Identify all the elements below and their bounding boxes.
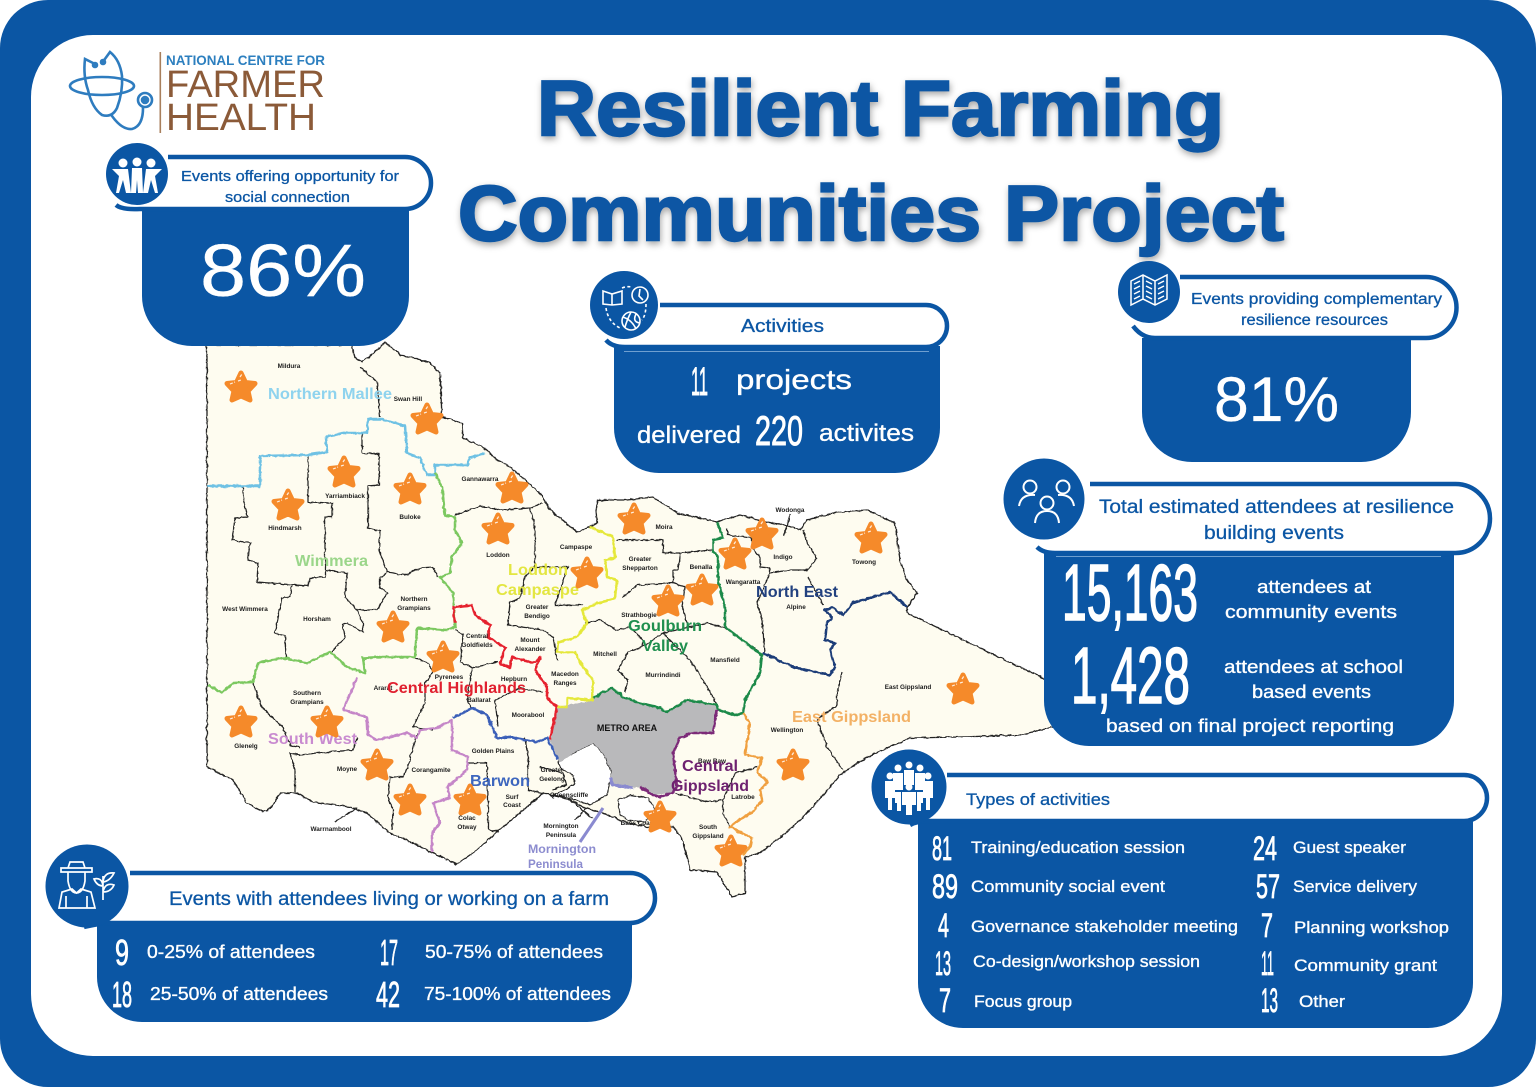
header text (1099, 497, 1454, 544)
Loddon Campaspe boundary (557, 527, 617, 707)
region labels: Loddon (508, 562, 568, 579)
local government labels: Hindmarsh (268, 525, 302, 532)
panel header (606, 305, 947, 347)
header text: Types of activities (966, 790, 1110, 809)
local government labels: Towong (852, 559, 876, 566)
local government labels: Ararat (374, 685, 393, 692)
panel body (1142, 338, 1411, 462)
local government labels: Queenscliffe (550, 792, 589, 799)
icon: three people (1004, 458, 1084, 540)
local government labels: Murrindindi (645, 672, 681, 679)
local government labels: Horsham (303, 616, 331, 623)
South West boundary (343, 678, 468, 852)
icon: farmer with plant (46, 844, 128, 928)
Goulburn Valley boundary (593, 522, 762, 715)
local government labels: Mornington (543, 823, 579, 830)
statistic: 1,428 school attendees: 1,428 (1071, 631, 1190, 720)
local government labels: Pyrenees (435, 674, 464, 681)
region labels: Peninsula (528, 857, 583, 871)
statistic: delivered 220 activites: 220 (755, 407, 803, 454)
left activity list: Co-design/workshop session (973, 953, 1200, 971)
panel header (1037, 484, 1490, 553)
local government boundaries (232, 367, 843, 831)
icon: people arm in arm (106, 143, 168, 205)
local government labels: Corangamite (411, 767, 451, 774)
header text: Events offering opportunity for (181, 168, 399, 185)
header text (181, 168, 399, 206)
local government labels: Latrobe (731, 794, 755, 801)
Central Highlands boundary (453, 605, 557, 740)
right activity list: Service delivery (1293, 878, 1418, 896)
statistic: 11 projects: projects (736, 364, 852, 395)
reporting note: based on final project reporting (1106, 715, 1394, 736)
local government labels: Geelong (539, 776, 565, 783)
local government labels: Alpine (786, 604, 806, 611)
North East boundary (763, 592, 907, 675)
statistic: 1,428 school attendees (1071, 631, 1403, 720)
header text: Total estimated attendees at resilience (1099, 497, 1454, 518)
left activity list: 89 (932, 868, 958, 906)
local government labels: Buloke (399, 514, 421, 521)
Central Gippsland boundary (640, 710, 717, 797)
local government labels (222, 363, 931, 840)
Mornington Peninsula boundary (610, 778, 633, 788)
local government labels: METRO AREA (597, 723, 658, 733)
region labels: Barwon (470, 773, 530, 790)
Barwon boundary (453, 708, 558, 760)
local government labels: Loddon (486, 552, 510, 559)
statistic: 1,428 school attendees: based events (1252, 681, 1371, 702)
statistic: delivered 220 activites: activites (819, 420, 914, 447)
icon: brochure (1118, 261, 1180, 323)
local government labels: Benalla (690, 564, 713, 571)
local government labels: Wangaratta (726, 579, 761, 586)
left activity list: 81 (932, 830, 952, 868)
right activity list: Guest speaker (1293, 839, 1407, 857)
thin divider (624, 351, 929, 352)
region labels: Wimmera (295, 553, 368, 570)
statistic: 11 projects: 11 (691, 360, 708, 404)
local government labels: Mansfield (710, 657, 740, 664)
local government labels: Ranges (553, 680, 577, 687)
left activity list: Focus group (974, 993, 1072, 1011)
local government labels: Goldfields (461, 642, 493, 649)
local government labels: Colac (458, 815, 476, 822)
local government labels: Swan Hill (394, 396, 422, 403)
logo text: HEALTH (166, 97, 316, 139)
farm attendance statistics: 9 (115, 932, 129, 973)
panel: activities (590, 271, 947, 473)
local government labels: Grampians (290, 699, 324, 706)
panel header (84, 873, 655, 927)
region labels: Valley (642, 638, 688, 655)
header text: social connection (225, 189, 350, 206)
panel body (614, 346, 940, 473)
left activity list: 4 (938, 907, 949, 945)
header text: Events with attendees living or working on a farm (169, 889, 609, 910)
title: Resilient Farming (537, 64, 1224, 152)
farm attendance statistics: 25-50% of attendees (150, 984, 328, 1004)
Northern Mallee boundary (207, 419, 485, 486)
panel body (918, 820, 1473, 1028)
statistic: 15,163 community attendees: community events (1225, 601, 1397, 622)
panel header (1133, 277, 1456, 338)
local government labels: Wodonga (776, 507, 805, 514)
region labels: South West (268, 731, 358, 748)
local government labels: Baw Baw (698, 758, 726, 765)
local government labels: Surf (506, 794, 519, 801)
farm attendance statistics: 75-100% of attendees (424, 984, 611, 1004)
local government labels: Mildura (278, 363, 301, 370)
project location stars (227, 373, 977, 864)
region labels: Gippsland (671, 778, 749, 795)
local government labels: Greater (541, 767, 564, 774)
statistic: 11 projects (691, 360, 852, 404)
region labels: Central (682, 758, 738, 775)
region labels: Mornington (528, 842, 596, 856)
local government labels: Peninsula (546, 832, 577, 839)
logo divider (160, 52, 161, 133)
statistic: 86%: 86% (200, 229, 366, 312)
local government labels: Yarriambiack (325, 493, 365, 500)
left activity list (932, 830, 1238, 1020)
left activity list: Governance stakeholder meeting (971, 918, 1238, 936)
local government labels: Central (466, 633, 488, 640)
farm attendance statistics: 0-25% of attendees (147, 942, 315, 962)
local government labels: Hepburn (501, 676, 527, 683)
farm attendance statistics: 50-75% of attendees (425, 942, 603, 962)
local government labels: Moira (655, 524, 673, 531)
title: Communities Project (458, 169, 1284, 257)
region labels: Northern Mallee (268, 386, 392, 403)
statistic: 15,163 community attendees: 15,163 (1062, 548, 1198, 637)
header text: building events (1204, 523, 1344, 544)
right activity list: 13 (1261, 982, 1278, 1020)
statistic: 81%: 81% (1214, 365, 1339, 435)
local government labels: Grampians (397, 605, 431, 612)
right activity list: 11 (1261, 945, 1274, 983)
farm attendance statistics (112, 932, 611, 1015)
farm attendance statistics: 42 (376, 974, 400, 1015)
region boundaries (207, 419, 907, 855)
statistic: 15,163 community attendees: attendees at (1257, 576, 1371, 597)
region labels: East Gippsland (792, 709, 911, 726)
farm attendance statistics: 18 (112, 974, 132, 1015)
map of Victoria (207, 342, 1060, 897)
right activity list: Other (1299, 993, 1346, 1011)
local government labels: Ballarat (467, 697, 492, 704)
Wimmera boundary (208, 473, 462, 693)
panel body (97, 922, 632, 1022)
panel: attendees on farms (46, 844, 655, 1022)
panel: total attendees (1004, 458, 1490, 746)
local government labels: Mount (520, 637, 540, 644)
statistic: delivered 220 activites (637, 407, 914, 454)
right activity list (1253, 830, 1449, 1020)
local government labels: Glenelg (234, 743, 258, 750)
local government labels: Bendigo (524, 613, 550, 620)
header text (1191, 291, 1442, 329)
local government labels: Wellington (771, 727, 803, 734)
icon: book clock and ball (590, 271, 658, 339)
local government labels: Golden Plains (472, 748, 515, 755)
local government labels: South (699, 824, 717, 831)
panel: types of activities (872, 750, 1487, 1028)
region labels: Central Highlands (387, 680, 526, 697)
local government labels: Moorabool (512, 712, 545, 719)
local government labels: Warrnambool (311, 826, 352, 833)
local government labels: Mitchell (593, 651, 617, 658)
local government labels: Campaspe (560, 544, 593, 551)
statistic: 1,428 school attendees: attendees at school (1224, 656, 1403, 677)
local government labels: Coast (503, 802, 522, 809)
panel header (910, 775, 1487, 825)
local government labels: Greater (629, 556, 652, 563)
local government labels: Moyne (337, 766, 358, 773)
icon: stethoscope (70, 52, 152, 129)
panel body (1044, 552, 1454, 746)
right activity list: 7 (1261, 907, 1273, 945)
region labels: Goulburn (628, 618, 702, 635)
region labels: North East (756, 584, 839, 601)
farm attendance statistics: 17 (380, 932, 398, 973)
header text: resilience resources (1241, 312, 1388, 329)
left activity list: Community social event (971, 878, 1165, 896)
logo text (166, 52, 325, 139)
region labels (268, 386, 911, 871)
panel header (116, 157, 431, 209)
logo text: FARMER (166, 64, 325, 106)
left activity list: 7 (939, 982, 951, 1020)
East Gippsland boundary (730, 713, 768, 855)
local government labels: East Gippsland (885, 684, 931, 691)
left activity list: 13 (935, 945, 951, 983)
local government labels: Bass Coast (621, 820, 656, 827)
local government labels: Greater (526, 604, 549, 611)
statistic: delivered 220 activites: delivered (637, 422, 741, 449)
panel body (142, 205, 409, 346)
local government labels: Strathbogie (621, 612, 657, 619)
land mass (207, 342, 1060, 897)
local government labels: Alexander (515, 646, 546, 653)
logo: National Centre for Farmer Health (70, 52, 325, 139)
right activity list: Community grant (1294, 957, 1437, 975)
panel: social connection (106, 143, 431, 346)
local government labels: Indigo (773, 554, 793, 561)
region labels: Campaspe (496, 582, 579, 599)
thin divider (1056, 556, 1441, 557)
icon: crowd (872, 750, 946, 824)
local government labels: Gippsland (692, 833, 724, 840)
local government labels: Macedon (551, 671, 579, 678)
local government labels: Northern (401, 596, 428, 603)
logo text: NATIONAL CENTRE FOR (166, 52, 325, 68)
right activity list: 24 (1253, 830, 1277, 868)
right activity list: Planning workshop (1294, 919, 1449, 937)
local government labels: Otway (457, 824, 477, 831)
local government labels: Southern (293, 690, 321, 697)
panel: resilience resources (1118, 261, 1456, 462)
local government labels: West Wimmera (222, 606, 268, 613)
Mornington pointer (580, 808, 603, 842)
local government labels: Gannawarra (462, 476, 499, 483)
header text: Activities (741, 316, 824, 336)
title (458, 64, 1284, 257)
right activity list: 57 (1256, 868, 1280, 906)
local government labels: Shepparton (622, 565, 658, 572)
header text: Events providing complementary (1191, 291, 1442, 308)
left activity list: Training/education session (971, 839, 1185, 857)
